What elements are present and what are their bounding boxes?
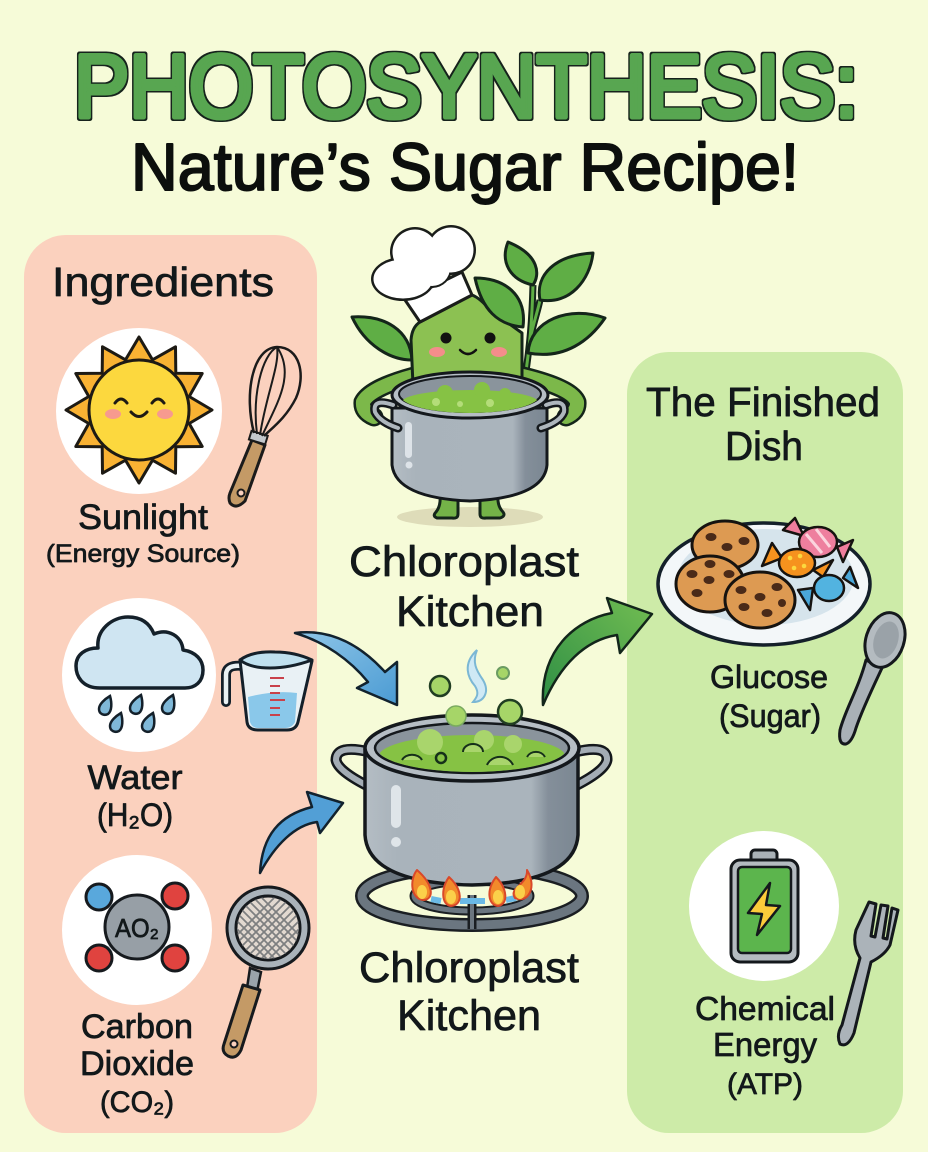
plant leaves (352, 242, 605, 378)
label: bottom chloroplast kitchen: Chloroplast (359, 944, 579, 992)
heading: ingredients: Ingredients (52, 259, 274, 305)
chef hat (371, 225, 476, 322)
arrow: carbon dioxide to pot (260, 792, 343, 873)
legs (434, 495, 504, 518)
chef body (411, 295, 522, 385)
icon: spoon (840, 607, 912, 744)
label: bottom chloroplast kitchen: Kitchen (397, 992, 541, 1040)
icon: burner (362, 867, 582, 929)
shadow (397, 507, 543, 527)
title (74, 36, 858, 205)
flames (412, 870, 532, 906)
label: glucose: Glucose (710, 659, 828, 695)
arms (363, 376, 577, 417)
icon: boiling pot (336, 715, 607, 906)
icon: molecule (62, 855, 212, 1005)
label: chemical energy: (ATP) (727, 1068, 803, 1101)
arrow: pot to finished dish (543, 598, 652, 705)
label: top chloroplast kitchen: Chloroplast (349, 538, 579, 586)
heading: the finished dish: The Finished (646, 379, 880, 425)
icon: chef plant with pot (352, 225, 605, 527)
label: chemical energy (695, 990, 835, 1101)
icon: whisk (229, 347, 301, 506)
icon: plate of cookies and candy (658, 518, 870, 645)
icon: battery (689, 831, 839, 981)
label: carbon dioxide: (CO₂) (100, 1086, 174, 1119)
icon: molecule: AO₂ (115, 913, 159, 943)
title: PHOTOSYNTHESIS: (74, 36, 858, 136)
label: carbon dioxide (80, 1008, 194, 1119)
front leaf (475, 278, 523, 327)
icon: fork (838, 902, 898, 1045)
label: top chloroplast kitchen (349, 538, 579, 636)
pot (375, 372, 564, 501)
label: carbon dioxide: Carbon (81, 1008, 193, 1046)
label: water: Water (88, 759, 182, 797)
arrow: water to pot (295, 632, 397, 705)
gas flame glow (431, 898, 516, 901)
green soup (380, 729, 564, 772)
panel: finished dish (627, 352, 912, 1133)
label: water: (H₂O) (97, 797, 173, 833)
heading: the finished dish (646, 379, 880, 469)
label: carbon dioxide: Dioxide (80, 1045, 194, 1083)
label: bottom chloroplast kitchen (359, 944, 579, 1040)
label: glucose: (Sugar) (719, 698, 821, 734)
icon: bubbles and steam (430, 650, 522, 726)
icon: measuring cup (226, 652, 312, 730)
label: sunlight: (Energy Source) (46, 540, 240, 568)
label: sunlight (46, 498, 240, 568)
label: top chloroplast kitchen: Kitchen (396, 588, 544, 636)
label: sunlight: Sunlight (78, 498, 208, 537)
panel: ingredients (24, 235, 317, 1133)
label: chemical energy: Chemical (695, 990, 835, 1027)
title: Nature’s Sugar Recipe! (131, 130, 799, 205)
label: glucose (710, 659, 828, 734)
label: water (88, 759, 182, 833)
heading: the finished dish: Dish (725, 423, 803, 469)
label: chemical energy: Energy (713, 1026, 817, 1063)
icon: strainer (223, 872, 309, 1057)
icon: sun (56, 328, 222, 494)
face (429, 332, 507, 357)
icon: rain cloud (62, 598, 216, 752)
